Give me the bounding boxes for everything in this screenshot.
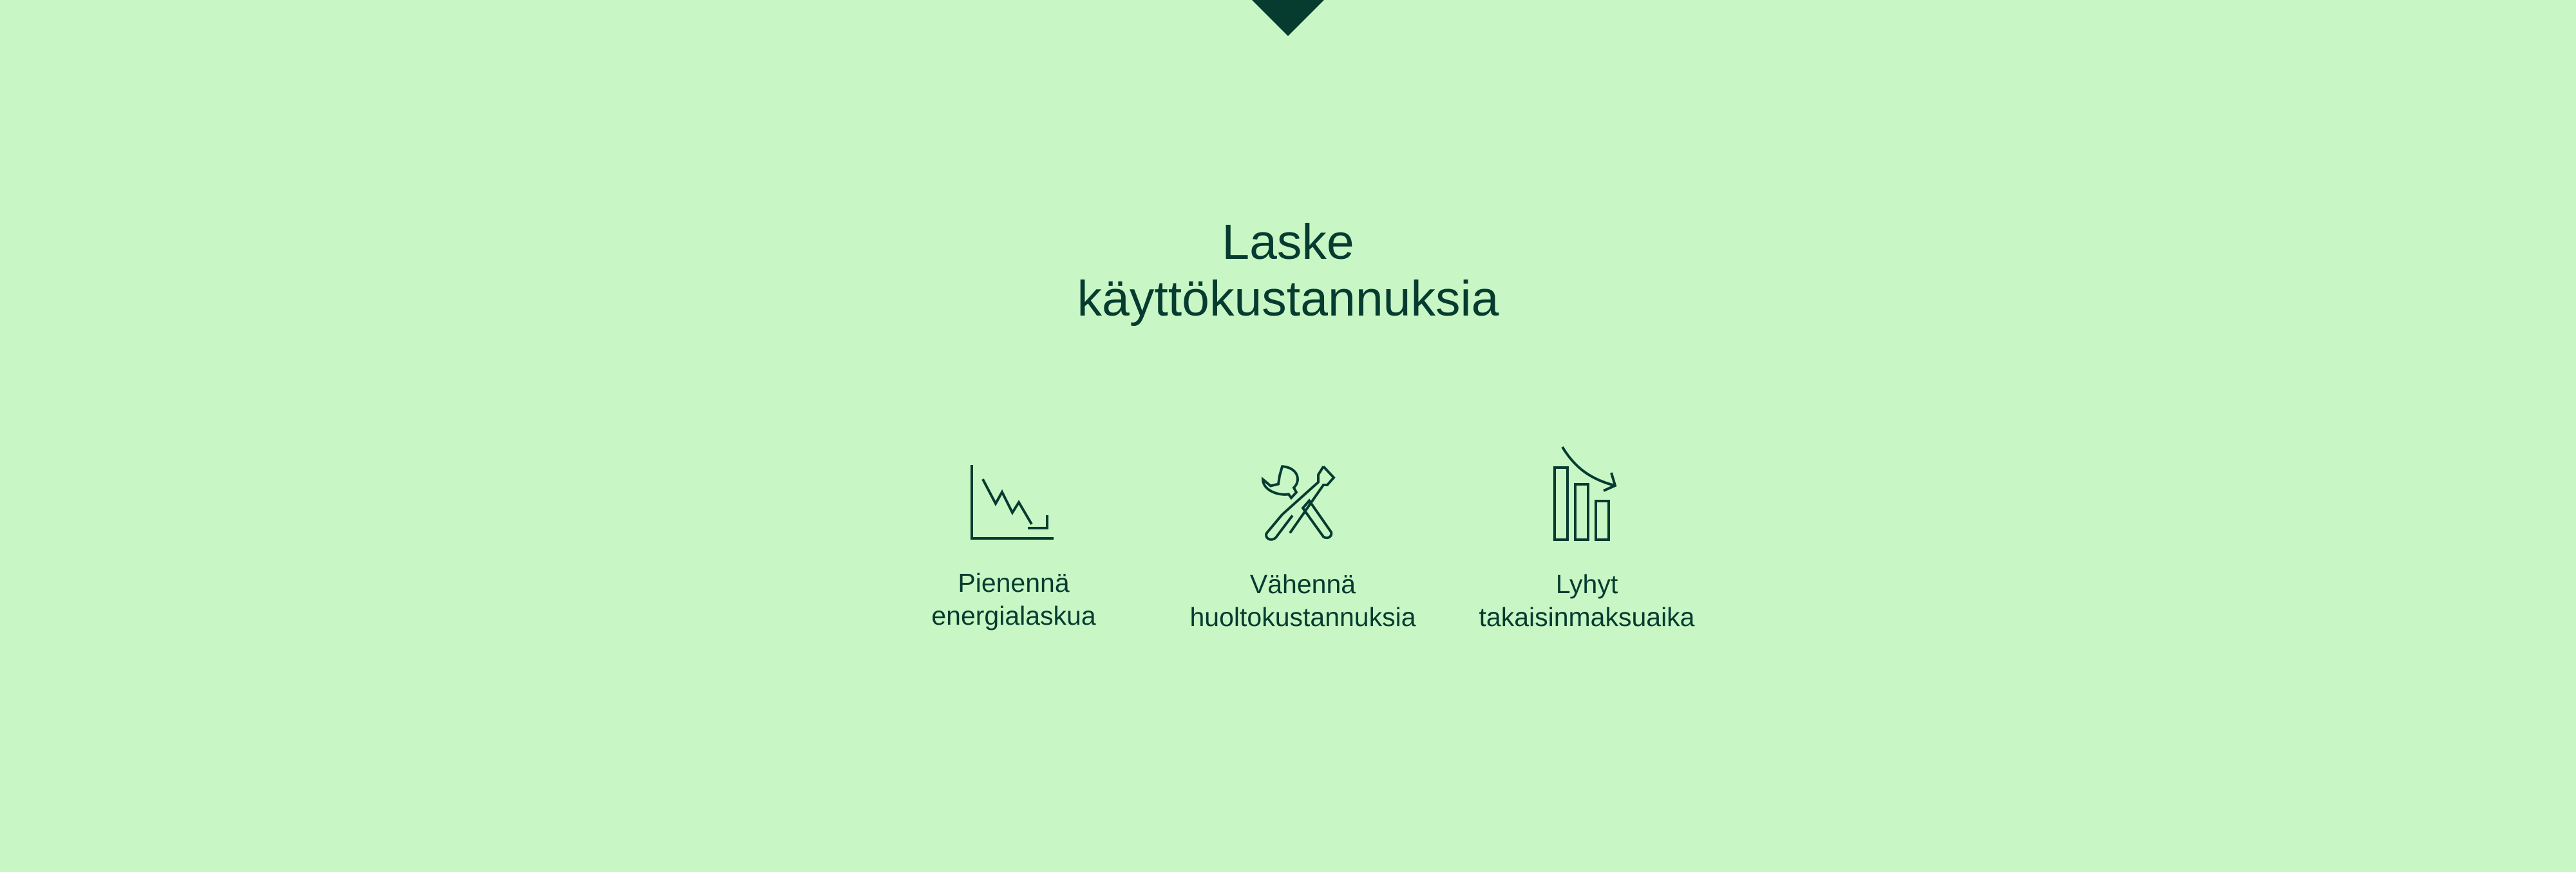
label: maintenance costs: huoltokustannuksia <box>1189 602 1416 632</box>
title <box>1077 214 1499 327</box>
title: käyttökustannuksia <box>1077 271 1499 327</box>
label: energy bill: energialaskua <box>931 601 1096 630</box>
title: Laske <box>1222 214 1354 270</box>
label: maintenance costs: Vähennä <box>1250 569 1356 599</box>
label: energy bill: Pienennä <box>958 568 1070 598</box>
arrow: top pointer <box>1252 0 1324 36</box>
label: payback time: takaisinmaksuaika <box>1479 602 1695 632</box>
label: maintenance costs <box>1189 569 1416 632</box>
label: payback time: Lyhyt <box>1556 569 1618 599</box>
label: energy bill <box>931 568 1096 630</box>
icon: declining chart <box>971 465 1054 540</box>
icon: wrench and screwdriver <box>1262 465 1336 541</box>
icon: bar chart with down arrow <box>1553 446 1616 541</box>
label: payback time <box>1479 569 1695 632</box>
